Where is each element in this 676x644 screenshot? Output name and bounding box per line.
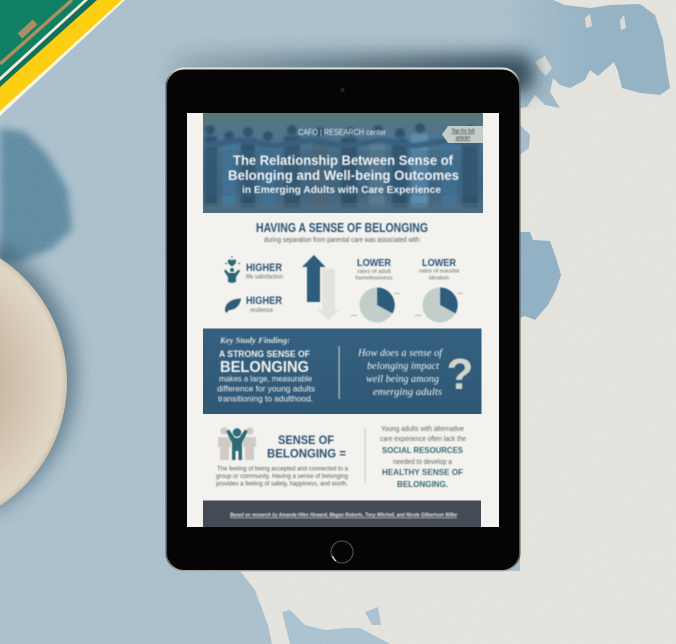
shadow above tablet <box>172 54 534 94</box>
stat: higher life satisfaction: life satisfaction <box>246 274 283 280</box>
arrow: down <box>317 269 340 320</box>
tablet <box>166 68 520 572</box>
bowl <box>0 226 76 530</box>
heading: sense of belonging =: SENSE OF <box>278 435 334 447</box>
finding text <box>217 349 315 404</box>
callout: social resources: HEALTHY SENSE OF <box>382 467 463 477</box>
callout: social resources: needed to develop a <box>393 459 452 466</box>
callout: social resources: SOCIAL RESOURCES <box>382 445 463 455</box>
finding text: difference for young adults <box>217 384 315 394</box>
stat: lower rates of suicidal ideation: ideation <box>429 276 449 282</box>
definition text <box>216 466 348 488</box>
section: sense of belonging definition <box>216 426 466 489</box>
title: Belonging and Well-being Outcomes <box>228 167 459 183</box>
section: having a sense of belonging <box>224 221 463 322</box>
callout: social resources: care experience often lack the <box>380 436 466 443</box>
header photo: crowd with arms linked <box>205 123 480 208</box>
stat: lower rates of suicidal ideation <box>419 257 459 282</box>
label: key study finding: Key Study Finding: <box>219 335 290 345</box>
icon: person with heart <box>224 256 240 283</box>
pie chart: suicidal ideation <box>415 287 463 322</box>
heading: sense of belonging =: BELONGING = <box>267 448 346 460</box>
tag: tap for full article <box>442 126 483 143</box>
tag: tap for full article: article! <box>456 136 470 142</box>
title: in Emerging Adults with Care Experience <box>242 184 441 196</box>
question text: belonging impact <box>367 360 440 372</box>
panel: key study finding <box>203 328 482 414</box>
decorative book: green cover with yellow band <box>0 0 125 116</box>
question text <box>357 347 444 398</box>
stat: lower rates of adult homelessness: LOWER <box>357 257 391 269</box>
pie chart: homelessness <box>351 287 400 322</box>
stat: lower rates of adult homelessness <box>355 257 393 282</box>
icon: leaf <box>225 298 241 313</box>
footer bar: Based on research by Amanda Hiles Howard, Megan Roberts, Tony Mitchell, and Nicole Gilbertson Wilke <box>230 512 458 518</box>
tablet body <box>166 68 520 572</box>
definition text: provides a feeling of safety, happiness, and worth. <box>216 480 348 488</box>
camera <box>340 88 344 92</box>
arrow: up <box>302 255 326 302</box>
title <box>228 152 459 196</box>
stat: higher life satisfaction <box>246 262 283 280</box>
heading: HAVING A SENSE OF BELONGING <box>256 221 428 235</box>
question text: emerging adults <box>373 386 442 398</box>
callout: social resources: BELONGING. <box>397 479 448 489</box>
callout: social resources: Young adults with alternative <box>381 426 464 433</box>
stat: higher resilience: resilience <box>250 307 273 314</box>
logo: CAFO | RESEARCH center <box>298 127 386 137</box>
finding text: transitioning to adulthood. <box>218 394 313 404</box>
icon: question mark: ? <box>447 350 473 399</box>
subheading: during separation from parental care was associated with: <box>264 235 421 244</box>
finding text: BELONGING <box>220 359 309 376</box>
footer bar <box>203 500 481 527</box>
question text: well being among <box>366 373 439 385</box>
tag: tap for full article: Tap for full <box>451 128 475 134</box>
stat: lower rates of suicidal ideation: LOWER <box>422 257 456 269</box>
finding text: A STRONG SENSE OF <box>219 349 310 360</box>
title: The Relationship Between Sense of <box>233 152 453 168</box>
question text: How does a sense of <box>357 347 444 359</box>
definition text: group or community. Having a sense of belonging <box>216 473 348 480</box>
finding text: makes a large, measurable <box>219 374 312 384</box>
panel: header banner <box>203 113 483 213</box>
stat: lower rates of suicidal ideation: rates of suicidal <box>419 268 459 274</box>
screen <box>187 113 499 527</box>
callout: social resources <box>380 426 466 489</box>
stat: lower rates of adult homelessness: homelessness <box>355 276 393 282</box>
definition text: The feeling of being accepted and connected to a <box>217 466 348 472</box>
icon: three people <box>218 427 256 460</box>
home button <box>331 541 353 563</box>
stat: higher resilience <box>246 295 282 314</box>
stat: higher life satisfaction: HIGHER <box>246 262 282 274</box>
heading: sense of belonging = <box>267 435 346 460</box>
stat: lower rates of adult homelessness: rates of adult <box>357 269 391 275</box>
stat: higher resilience: HIGHER <box>246 295 282 307</box>
